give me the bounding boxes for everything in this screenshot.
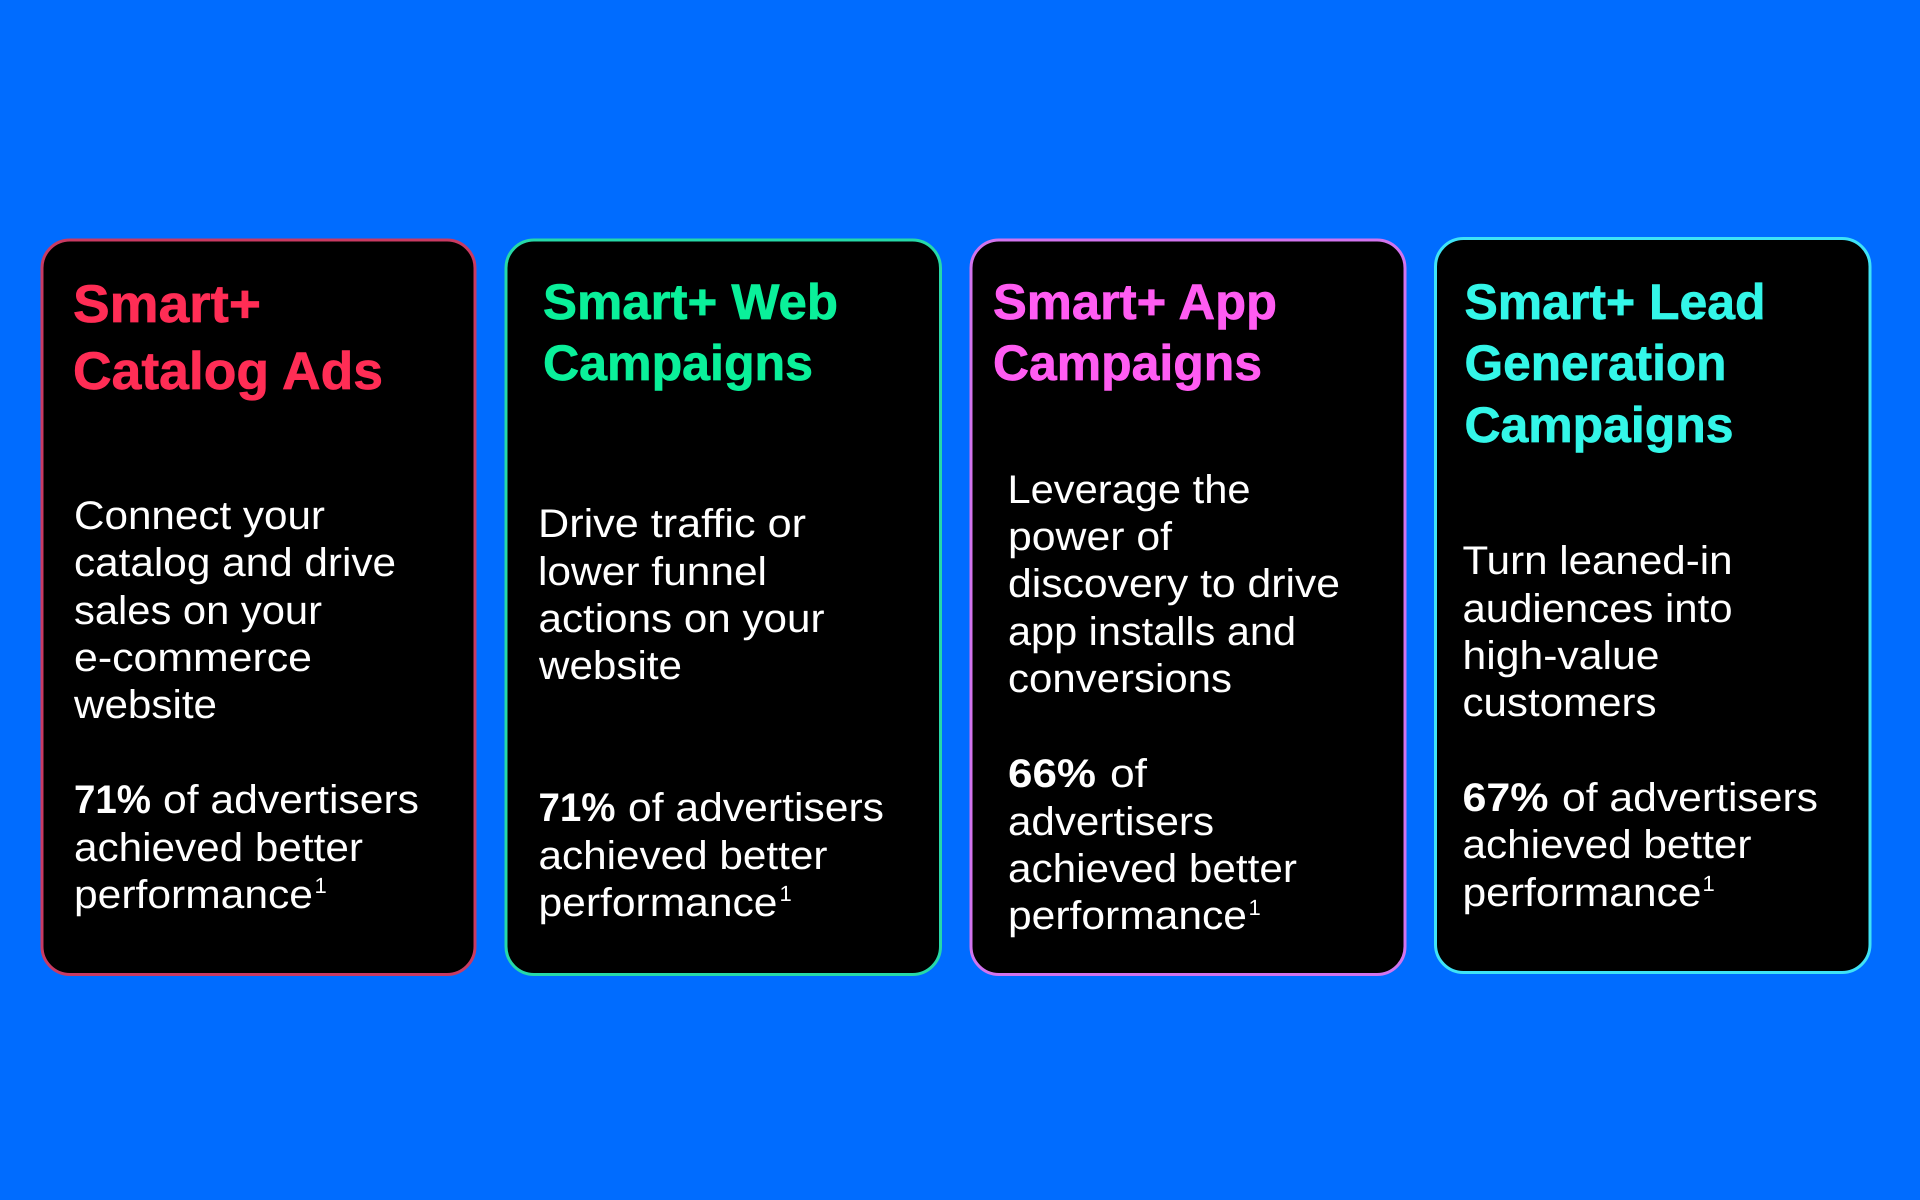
stat: 71% of advertisers: performance <box>74 873 313 917</box>
card outline <box>506 240 940 974</box>
card outline <box>971 240 1405 974</box>
heading: Smart+ Catalog Ads: Catalog Ads <box>73 342 383 401</box>
heading: Smart+ Web Campaigns: Campaigns <box>543 335 813 391</box>
description text: Leverage the <box>1008 468 1250 512</box>
stat: 66% of advertisers: 66% <box>1008 752 1096 796</box>
stat: 67% of advertisers <box>1462 776 1818 915</box>
heading: Smart+ Lead Generation Campaigns: Generation <box>1464 335 1726 391</box>
description text <box>1008 468 1340 701</box>
stat: 71% of advertisers: performance <box>538 881 778 925</box>
description text: sales on your <box>74 589 322 633</box>
stat: 67% of advertisers: performance <box>1462 871 1702 915</box>
stat: 71% of advertisers: 71% <box>538 786 616 830</box>
description text <box>73 494 396 727</box>
description text: audiences into <box>1462 587 1732 631</box>
description text: Drive traffic or <box>538 502 806 546</box>
stat: 66% of advertisers: of <box>1110 752 1148 796</box>
description text: discovery to drive <box>1008 562 1340 606</box>
heading: Smart+ Lead Generation Campaigns: Campaigns <box>1464 397 1734 453</box>
stat: 67% of advertisers: 67% <box>1462 776 1548 820</box>
panel: Smart+ App Campaigns <box>971 240 1405 974</box>
heading: Smart+ Web Campaigns: Smart+ Web <box>543 274 838 330</box>
heading: Smart+ Catalog Ads: Smart+ <box>73 275 261 334</box>
stat: 66% of advertisers: achieved better <box>1008 847 1297 891</box>
heading: Smart+ Web Campaigns <box>543 274 838 391</box>
stat: 71% of advertisers: achieved better <box>74 826 363 870</box>
stat: 71% of advertisers: 1 <box>314 873 327 898</box>
description text: customers <box>1462 681 1656 725</box>
panel: Smart+ Web Campaigns <box>506 240 940 974</box>
heading: Smart+ Lead Generation Campaigns <box>1464 274 1766 453</box>
description text: e-commerce <box>74 636 312 680</box>
description text: power of <box>1008 515 1173 559</box>
stat: 66% of advertisers <box>1008 752 1297 938</box>
stat: 66% of advertisers: performance <box>1008 894 1247 938</box>
stat: 71% of advertisers: 71% <box>74 778 151 822</box>
heading: Smart+ App Campaigns: Smart+ App <box>993 274 1277 330</box>
description text: conversions <box>1008 657 1232 701</box>
panel: Smart+ Catalog Ads <box>42 240 475 974</box>
card outline <box>42 240 475 974</box>
description text: catalog and drive <box>74 541 396 585</box>
heading: Smart+ Catalog Ads <box>73 275 383 401</box>
description text: actions on your <box>538 597 824 641</box>
panel: Smart+ Lead Generation Campaigns <box>1436 238 1870 972</box>
description text <box>538 502 824 688</box>
stat: 71% of advertisers <box>538 786 884 925</box>
description text: Turn leaned-in <box>1462 539 1732 583</box>
description text: high-value <box>1462 634 1660 678</box>
description text: Connect your <box>74 494 325 538</box>
stat: 66% of advertisers: advertisers <box>1008 800 1214 844</box>
stat: 67% of advertisers: 1 <box>1702 871 1715 896</box>
card outline <box>1436 238 1870 972</box>
stat: 67% of advertisers: achieved better <box>1462 823 1752 867</box>
heading: Smart+ App Campaigns: Campaigns <box>993 335 1262 391</box>
description text: app installs and <box>1008 610 1296 654</box>
description text: website <box>538 644 682 688</box>
heading: Smart+ Lead Generation Campaigns: Smart+ Lead <box>1464 274 1766 330</box>
description text <box>1462 539 1732 725</box>
stat: 71% of advertisers: 1 <box>780 881 792 906</box>
description text: website <box>73 683 217 727</box>
stat: 67% of advertisers: of advertisers <box>1562 776 1818 820</box>
stat: 66% of advertisers: 1 <box>1248 895 1261 920</box>
stat: 71% of advertisers: of advertisers <box>163 778 419 822</box>
stat: 71% of advertisers <box>74 778 419 917</box>
stat: 71% of advertisers: of advertisers <box>628 786 884 830</box>
description text: lower funnel <box>538 550 767 594</box>
heading: Smart+ App Campaigns <box>993 274 1277 391</box>
stat: 71% of advertisers: achieved better <box>538 834 828 878</box>
